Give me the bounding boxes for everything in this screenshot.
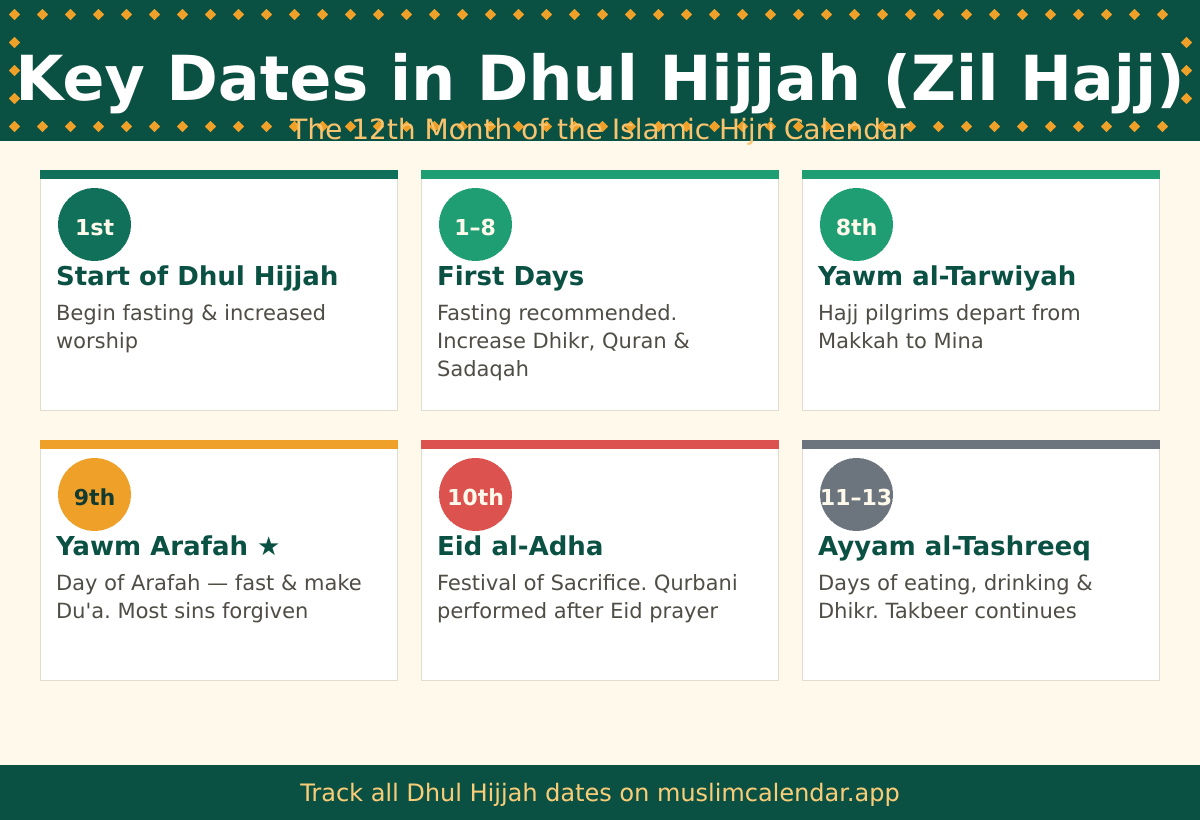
header banner [0, 0, 1200, 141]
footer text: Track all Dhul Hijjah dates on muslimcalendar.app [299, 779, 900, 807]
heading: First Days: First Days [437, 262, 584, 292]
title: Key Dates in Dhul Hijjah (Zil Hajj) [15, 42, 1185, 115]
badge: 8th [820, 188, 893, 261]
panel: 1st [40, 170, 398, 410]
badge: 10th [439, 458, 512, 531]
badge: 10th: 10th [447, 486, 504, 511]
text: description: Hajj pilgrims depart from [818, 301, 1081, 325]
text: description: Fasting recommended. [437, 301, 677, 325]
panel: 1-8 [421, 170, 779, 410]
badge: 11-13 [820, 458, 893, 531]
heading: Yawm al-Tarwiyah: Yawm al-Tarwiyah [817, 262, 1076, 292]
text: description: Du'a. Most sins forgiven [56, 599, 308, 623]
footer bar [0, 765, 1200, 820]
text: description: Begin fasting & increased [56, 301, 326, 325]
heading: Start of Dhul Hijjah: Start of Dhul Hijjah [56, 262, 338, 292]
text: description: worship [56, 329, 138, 353]
panel: 11-13 [802, 440, 1160, 680]
text: description: Makkah to Mina [818, 329, 984, 353]
heading: Ayyam al-Tashreeq: Ayyam al-Tashreeq [818, 532, 1091, 562]
text: description: Increase Dhikr, Quran & [437, 329, 690, 353]
badge: 1-8 [439, 188, 512, 261]
badge: 1-8: 1–8 [454, 216, 496, 241]
panel: 10th [421, 440, 779, 680]
heading: Yawm Arafah: Yawm Arafah ★ [55, 532, 280, 562]
badge: 9th: 9th [74, 486, 115, 511]
badge: 1st [58, 188, 131, 261]
subtitle: The 12th Month of the Islamic Hijri Calendar [289, 113, 910, 146]
badge: 9th [58, 458, 131, 531]
text: description: Sadaqah [437, 357, 529, 381]
panel: 8th [802, 170, 1160, 410]
text: description: Days of eating, drinking & [818, 571, 1093, 595]
text: description: Dhikr. Takbeer continues [818, 599, 1077, 623]
text: description: Day of Arafah — fast & make [56, 571, 362, 595]
text: description: Festival of Sacrifice. Qurbani [437, 571, 738, 595]
text: description: performed after Eid prayer [437, 599, 718, 623]
badge: 11-13: 11–13 [820, 486, 892, 511]
badge: 8th: 8th [836, 216, 877, 241]
panel: 9th [40, 440, 398, 680]
heading: Eid al-Adha: Eid al-Adha [437, 532, 603, 562]
badge: 1st: 1st [75, 216, 114, 241]
